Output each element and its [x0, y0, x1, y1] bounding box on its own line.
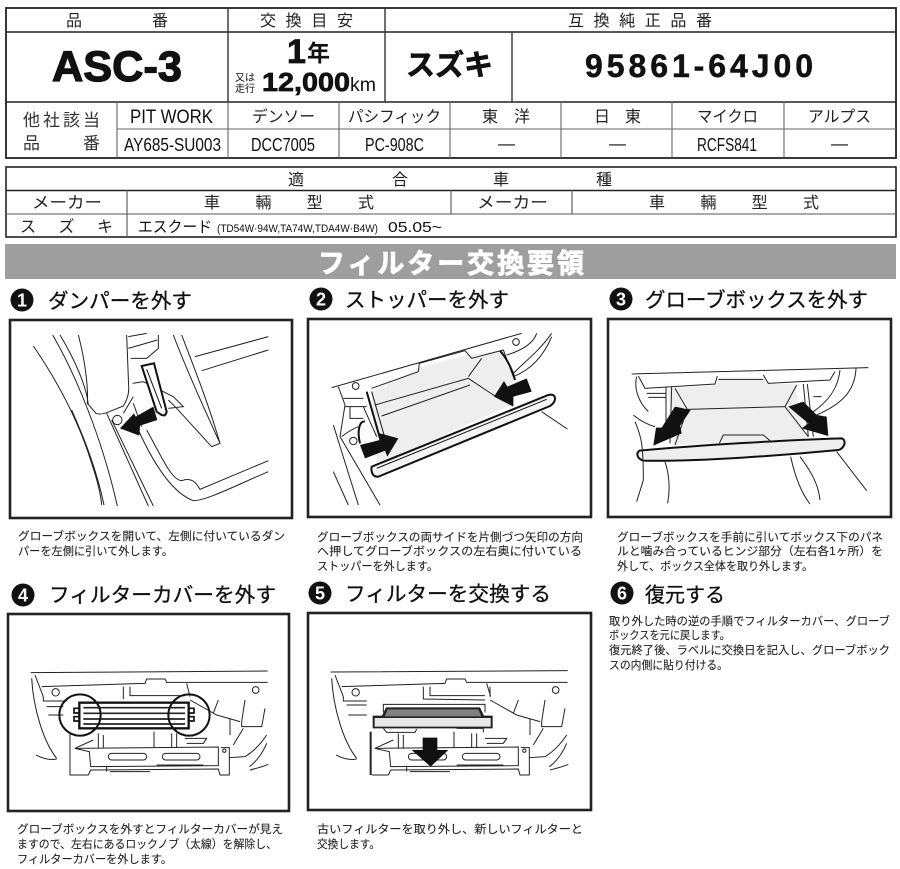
vehicle row: (TD54W·94W,TA74W,TDA4W·B4W) [217, 223, 378, 235]
interval: 12,000 km: km [350, 75, 376, 96]
step 6 number [610, 582, 634, 604]
step 1 [10, 288, 292, 558]
table title: 適 [288, 171, 304, 189]
brand part numbers: — [609, 134, 626, 153]
table title: 種 [596, 171, 612, 189]
step 5 [308, 582, 591, 851]
other brand label: 品番 [23, 134, 100, 153]
step 5 number: 5 [315, 584, 325, 604]
table title: 合 [392, 171, 408, 189]
step 1 text: グローブボックスを開いて、左側に付いているダン [18, 529, 285, 543]
vehicle row [20, 218, 442, 236]
brand names: デンソー [252, 107, 315, 126]
step 2 heading: ストッパーを外す [345, 289, 509, 312]
step 6 text: 取り外した時の逆の手順でフィルターカバー、グローブ [609, 614, 890, 628]
brand part numbers: — [831, 134, 848, 153]
column headers: メーカー [32, 195, 102, 212]
step 6 [609, 582, 890, 672]
column headers: メーカー [477, 195, 548, 212]
step 4 text [17, 822, 283, 866]
part number ASC-3: ASC-3 [52, 43, 182, 91]
step 3 text: グローブボックスを手前に引いてボックス下のパネ [617, 530, 883, 544]
other brand label: 他社該当 [23, 111, 100, 130]
step 2 text [317, 530, 583, 573]
interval: 1 year [287, 33, 330, 71]
step 5 illustration [308, 613, 591, 810]
brand names [130, 107, 871, 128]
vehicle row: スズキ [20, 218, 113, 236]
step 2 illustration [308, 319, 591, 517]
interval: 12,000 km: 走行 [235, 82, 255, 95]
step 4 text: フィルターカバーを外します。 [17, 853, 172, 866]
column headers: 車輛型式 [649, 194, 819, 212]
brand names: 日東 [594, 108, 641, 126]
step 4 number [12, 584, 34, 606]
step 1 heading: ダンパーを外す [48, 290, 192, 313]
step 2 text: へ押してグローブボックスの左右奥に付いている [317, 544, 582, 558]
brand part numbers [124, 134, 848, 155]
interval: 1 year: 年 [307, 40, 330, 66]
vehicle row: 05.05~ [388, 219, 442, 236]
vehicle row: エスクード [138, 218, 212, 236]
step 6 text: スの内側に貼り付ける。 [609, 658, 728, 672]
step 3 heading: グローブボックスを外す [645, 288, 868, 312]
brand part numbers: AY685-SU003 [124, 135, 221, 155]
spec table [6, 8, 896, 158]
step 2 [308, 288, 591, 573]
OEM number: 95861-64J00 [585, 48, 813, 84]
interval: 12,000 km: 12,000 [262, 67, 350, 97]
interval: 12,000 km [235, 67, 376, 97]
step 2 number: 2 [316, 290, 326, 310]
step 5 text: 交換します。 [317, 838, 380, 851]
compatible vehicles table [6, 167, 896, 237]
maker Suzuki: スズキ [406, 48, 493, 82]
banner: フィルター交換要領 [318, 249, 584, 279]
step 6 text [609, 614, 890, 672]
interval: 1 year: 1 [287, 33, 306, 71]
step 1 number [10, 288, 34, 312]
step 4 text: ますので、左右にあるロックノブ（太線）を解除し、 [17, 837, 277, 851]
step 5 text [317, 822, 583, 851]
brand part numbers: — [498, 134, 515, 153]
interval: 12,000 km: 又は [235, 72, 255, 84]
brand names: マイクロ [697, 108, 758, 126]
step 1 text: パーを左側に引いて外します。 [18, 544, 173, 558]
step 3 [608, 288, 891, 573]
step 3 text [617, 530, 883, 573]
brand part numbers: RCFS841 [697, 135, 757, 155]
step 6 text: ボックスを元に戻します。 [609, 629, 730, 642]
step 4 text: グローブボックスを外すとフィルターカバーが見え [17, 822, 283, 836]
banner [5, 244, 896, 279]
step 1 number: 1 [17, 290, 27, 310]
brand part numbers: DCC7005 [251, 135, 315, 155]
other brand label [23, 111, 100, 153]
step 2 text: グローブボックスの両サイドを片側づつ矢印の方向 [317, 530, 583, 544]
step 3 text: 外して、ボックス全体を取り外します。 [617, 559, 813, 573]
column headers [32, 194, 819, 212]
step 2 text: ストッパーを外します。 [317, 560, 438, 573]
column headers: 車輛型式 [204, 194, 374, 212]
step 4 [8, 584, 289, 866]
step 3 illustration [608, 319, 891, 517]
step 2 number [310, 288, 332, 310]
step 3 text: ルと噛み合っているヒンジ部分（左右各1ヶ所）を [617, 544, 883, 558]
table title [288, 171, 612, 189]
step 6 text: 復元終了後、ラベルに交換日を記入し、グローブボック [609, 643, 890, 657]
step 1 text [18, 529, 285, 558]
table title: 車 [493, 171, 509, 189]
step 3 number [610, 288, 632, 310]
brand names: パシフィック [348, 108, 441, 126]
brand part numbers: PC-908C [365, 135, 424, 155]
step 4 heading: フィルターカバーを外す [49, 584, 276, 607]
step 3 number: 3 [616, 290, 626, 310]
step 1 illustration [10, 320, 292, 518]
header: part number: 品番 [66, 12, 168, 30]
step 5 heading: フィルターを交換する [345, 583, 551, 606]
header: OEM part number: 互換純正品番 [568, 12, 712, 30]
header: replacement interval: 交換目安 [260, 12, 353, 30]
brand names: PIT WORK [130, 107, 213, 128]
step 6 number: 6 [617, 584, 627, 604]
brand names: 東洋 [482, 108, 530, 126]
step 5 number [308, 582, 332, 604]
step 4 number: 4 [18, 586, 28, 606]
step 6 heading: 復元する [645, 584, 725, 607]
brand names: アルプス [808, 108, 871, 126]
step 5 text: 古いフィルターを取り外し、新しいフィルターと [317, 822, 583, 836]
step 4 illustration [8, 614, 289, 811]
